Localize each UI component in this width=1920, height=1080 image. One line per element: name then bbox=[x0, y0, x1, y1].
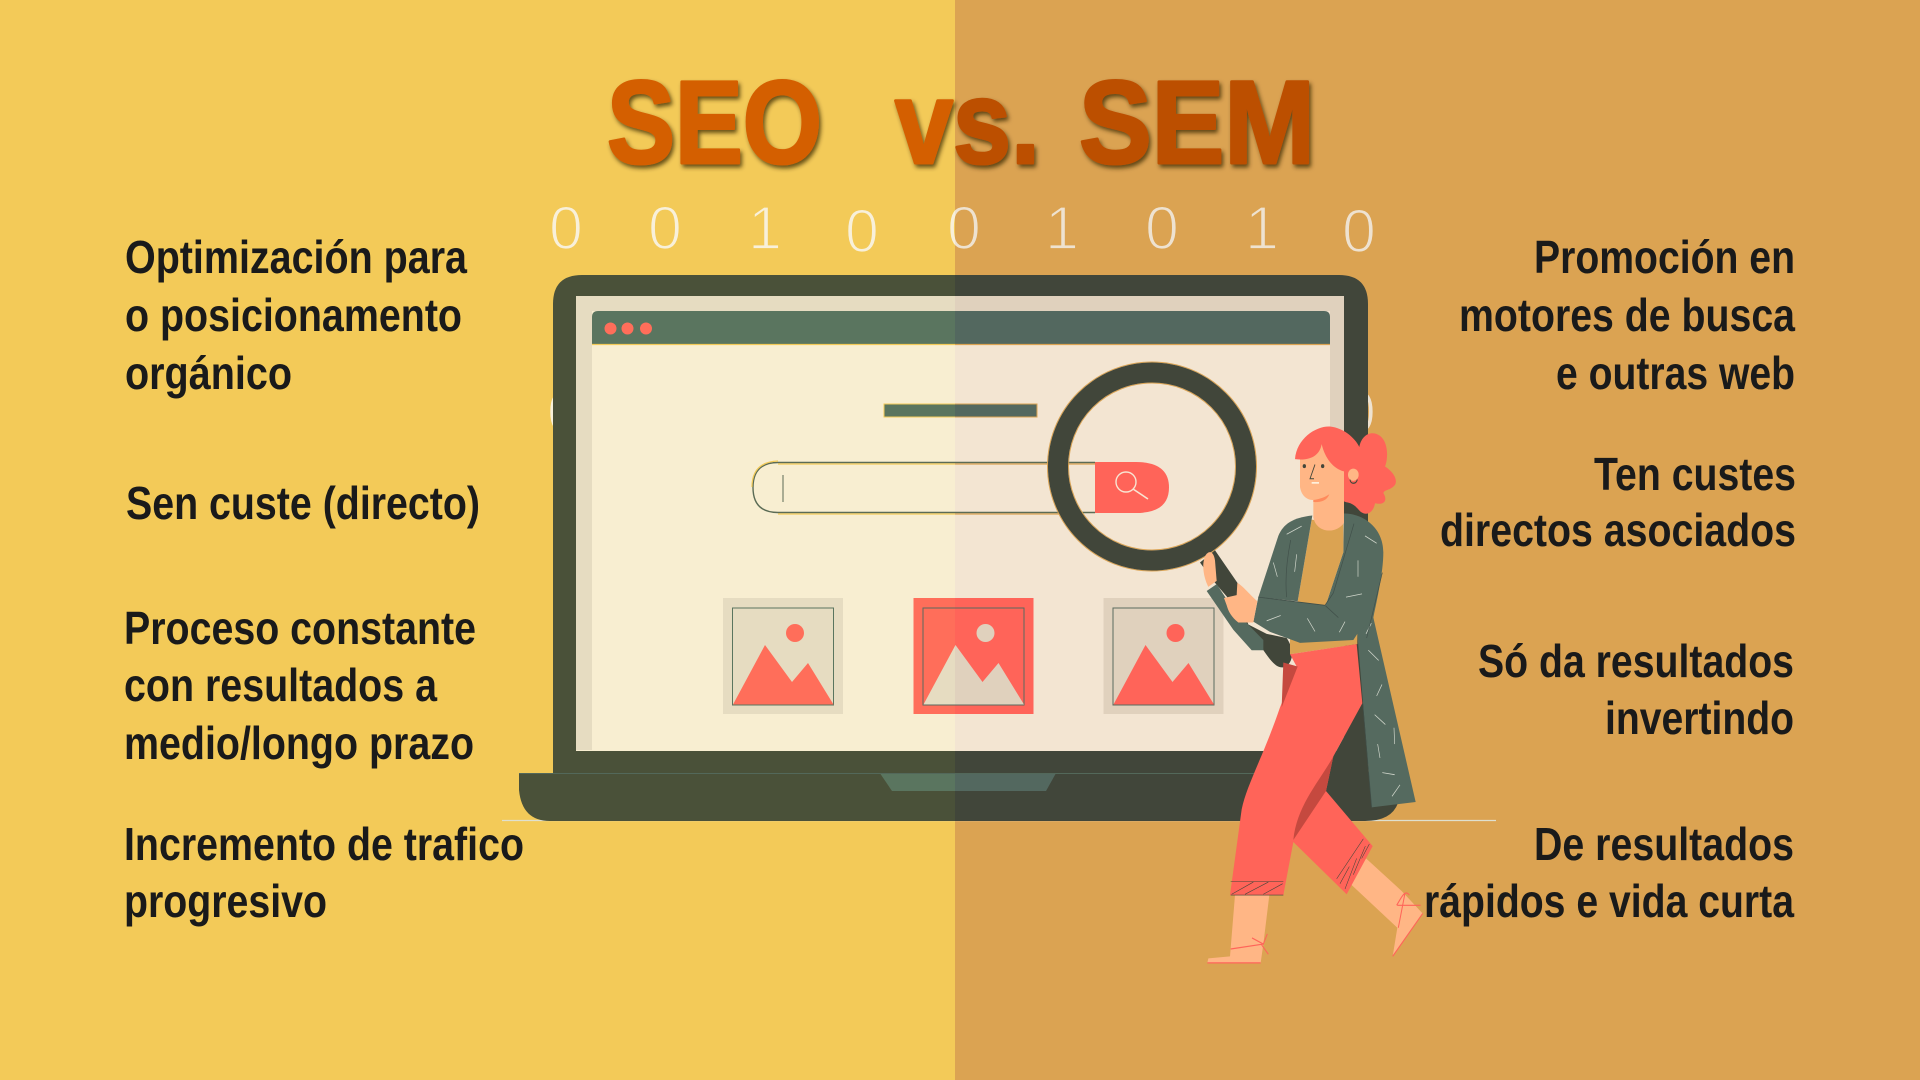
text: search engine promotion bbox=[1459, 231, 1795, 399]
magnifier ring bbox=[1048, 362, 1256, 571]
text: fast short-lived results bbox=[1424, 818, 1794, 927]
text: organic optimisation bbox=[125, 231, 467, 399]
binary digits row: 0 bbox=[1145, 194, 1179, 262]
binary digits row: 0 bbox=[547, 378, 581, 446]
browser header bar bbox=[592, 311, 1330, 344]
image card 2 bbox=[914, 598, 1034, 714]
pants folds bbox=[1282, 662, 1333, 840]
binary digits row: 0 bbox=[845, 197, 879, 265]
text: fast short-lived results: rápidos e vida curta bbox=[1424, 875, 1794, 927]
left column: SEO features bbox=[124, 231, 524, 927]
text: search engine promotion: motores de busca bbox=[1459, 289, 1795, 341]
text: direct costs: directos asociados bbox=[1440, 504, 1796, 556]
pants bbox=[1230, 644, 1373, 895]
text: direct costs bbox=[1440, 448, 1796, 556]
tan top bbox=[1290, 520, 1357, 654]
binary digits row bbox=[547, 194, 1376, 446]
title: SEO vs. SEM: SEO bbox=[607, 57, 822, 189]
title: SEO vs. SEM: SEM bbox=[1079, 57, 1315, 189]
page title bar bbox=[884, 404, 1037, 417]
text: progressive traffic: Incremento de trafico bbox=[124, 818, 524, 870]
sandals bbox=[1207, 893, 1423, 963]
text: results only when investing: Só da resultados bbox=[1478, 635, 1794, 687]
pants cuffs bbox=[1231, 839, 1369, 895]
chin shadow bbox=[1313, 494, 1329, 502]
text: organic optimisation: o posicionamento bbox=[125, 289, 462, 341]
right column: SEM features bbox=[1424, 231, 1796, 927]
coat left lapel bbox=[1258, 516, 1312, 601]
image cards bbox=[723, 598, 1224, 714]
coat back panel bbox=[1325, 513, 1416, 807]
back arm sleeve bbox=[1207, 584, 1263, 650]
text: organic optimisation: Optimización para bbox=[125, 231, 467, 283]
text: no direct cost: Sen custe (directo) bbox=[126, 477, 480, 529]
laptop illustration bbox=[502, 275, 1496, 821]
screen shade strips bbox=[576, 296, 1344, 750]
neck and face bbox=[1300, 444, 1344, 531]
text: constant process: medio/longo prazo bbox=[124, 717, 474, 769]
ear and earring bbox=[1348, 469, 1359, 483]
text: direct costs: Ten custes bbox=[1594, 448, 1796, 500]
laptop base bbox=[519, 773, 1400, 821]
ground line bbox=[502, 820, 1496, 822]
screen bbox=[576, 296, 1344, 751]
binary digits row: 0 bbox=[947, 194, 981, 262]
text: progressive traffic bbox=[124, 818, 524, 927]
dark shape behind legs bbox=[1326, 703, 1397, 820]
binary digits row: 1 bbox=[1245, 194, 1279, 262]
text: constant process: Proceso constante bbox=[124, 602, 476, 654]
image card 3 bbox=[1104, 598, 1224, 714]
binary digits row: 0 bbox=[648, 194, 682, 262]
binary digits row: 0 bbox=[1342, 378, 1376, 446]
text: results only when investing bbox=[1478, 635, 1794, 744]
title: SEO vs. SEM bbox=[607, 57, 1315, 189]
text: search engine promotion: e outras web bbox=[1556, 347, 1795, 399]
face details bbox=[1303, 464, 1324, 483]
text: fast short-lived results: De resultados bbox=[1534, 818, 1794, 870]
text: organic optimisation: orgánico bbox=[125, 347, 292, 399]
title: SEO vs. SEM: vs. bbox=[895, 57, 1040, 189]
binary digits row: 1 bbox=[748, 194, 782, 262]
text: progressive traffic: progresivo bbox=[124, 875, 327, 927]
text: results only when investing: invertindo bbox=[1605, 692, 1794, 744]
binary digits row: 1 bbox=[1045, 194, 1079, 262]
binary digits row: 0 bbox=[549, 194, 583, 262]
legs bbox=[1207, 858, 1423, 963]
text: constant process bbox=[124, 602, 476, 769]
coat stitch lines bbox=[1267, 526, 1400, 796]
image card 1 bbox=[723, 598, 843, 714]
laptop lid bbox=[553, 275, 1368, 776]
hands bbox=[1203, 552, 1257, 622]
base notch bbox=[880, 774, 1056, 791]
text: constant process: con resultados a bbox=[124, 659, 437, 711]
hair bbox=[1295, 426, 1396, 514]
magnifier handle bbox=[1200, 550, 1292, 667]
binary digits row: 0 bbox=[1342, 197, 1376, 265]
illustration: woman holding magnifying glass bbox=[1048, 362, 1423, 963]
search bar bbox=[752, 461, 1169, 514]
coat sleeve bbox=[1253, 597, 1373, 643]
text: search engine promotion: Promoción en bbox=[1534, 231, 1795, 283]
coat seam lines bbox=[1258, 524, 1382, 807]
